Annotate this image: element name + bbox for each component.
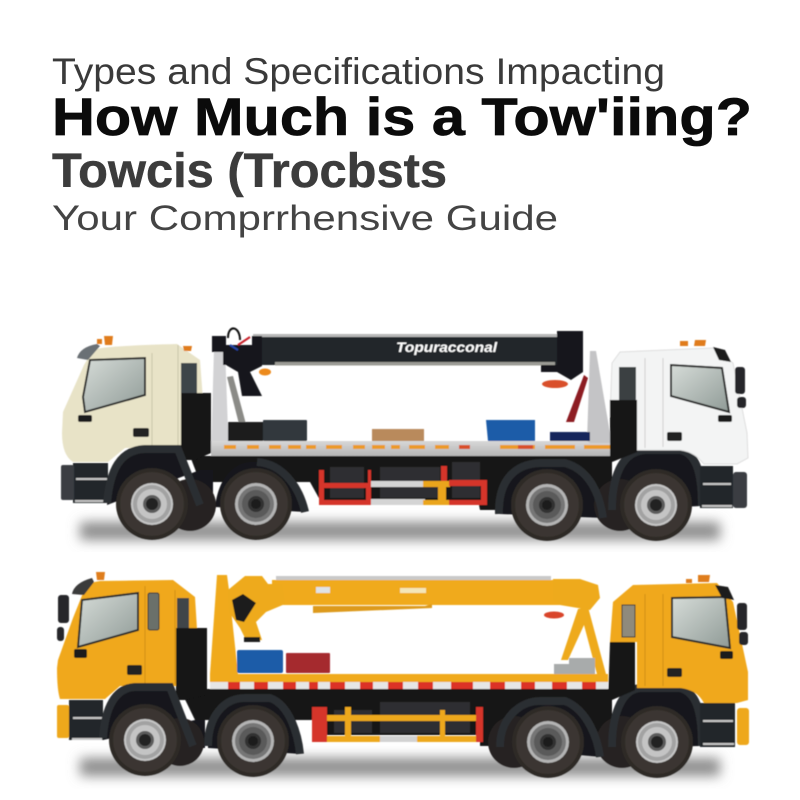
deck stripe	[210, 682, 608, 689]
grey cargo	[554, 658, 595, 674]
wooden crate	[372, 429, 424, 441]
hoses left	[228, 328, 250, 350]
door handles	[667, 432, 682, 441]
windshield	[83, 358, 145, 412]
wheel 4	[620, 469, 692, 541]
boom lettering: Topuracconal	[396, 339, 498, 355]
boom	[253, 334, 559, 366]
wheel 2	[217, 705, 289, 777]
red stripe accents	[459, 445, 533, 449]
right headboard	[587, 351, 612, 443]
dark toolbox	[263, 420, 307, 441]
left bumper and steps	[57, 700, 103, 740]
ground shadow	[80, 522, 720, 540]
windshield	[672, 597, 730, 648]
left headboard	[210, 575, 238, 674]
storage boxes under deck	[334, 702, 470, 733]
truck: top, cream and white cabs with black boom	[61, 328, 748, 541]
roof lamps	[680, 340, 706, 346]
visor	[715, 585, 734, 600]
ground shadow	[80, 758, 720, 776]
yellow left cab	[57, 572, 198, 699]
side guard: yellow rails with red ends	[312, 707, 483, 742]
cream cab	[62, 336, 203, 462]
amber lamp on crane	[259, 368, 271, 376]
right bumper and steps	[700, 703, 749, 747]
truck: bottom, yellow	[57, 572, 749, 778]
roof lamps	[686, 575, 710, 583]
title line: types and specifications: Types and Specifications Impacting	[52, 51, 665, 92]
title line: trucks: Towcis (Trocbsts	[52, 145, 447, 198]
door handles	[667, 668, 682, 677]
windshield	[78, 593, 138, 647]
crane head dark details	[232, 594, 260, 642]
rear tyres peeking	[156, 718, 204, 766]
door handles	[127, 665, 142, 675]
yellow right cab	[610, 575, 748, 703]
cargo behind right headboard	[550, 432, 590, 441]
mirrors	[737, 603, 747, 630]
chassis	[180, 689, 612, 746]
right bumper and steps	[700, 466, 747, 508]
roof lamps	[97, 336, 192, 351]
blue toolbox	[486, 420, 535, 441]
red toolbox	[286, 653, 330, 673]
deck	[210, 674, 608, 683]
wheel 3	[512, 706, 584, 778]
orange hook pad	[544, 612, 564, 618]
deck stripe	[224, 445, 610, 449]
crane head left	[212, 336, 262, 396]
blue toolbox	[237, 650, 283, 673]
wheel arches	[107, 449, 702, 518]
rear tyres peeking	[164, 479, 216, 531]
wheel wells	[103, 687, 702, 757]
wheel wells	[107, 449, 702, 518]
crane head right	[553, 579, 600, 610]
roof lamp	[96, 572, 105, 580]
chassis	[190, 456, 612, 510]
engine gap left	[181, 393, 211, 460]
wheel 1	[109, 704, 181, 776]
wheel 4	[621, 706, 693, 778]
engine gap left	[176, 628, 207, 700]
wheel 3	[511, 469, 583, 541]
louvre window	[622, 605, 635, 637]
right a-frame	[561, 607, 606, 674]
title line: guide: Your Comprrhensive Guide	[52, 199, 558, 238]
rear tyre peeking middle	[488, 716, 540, 768]
visor	[713, 347, 731, 362]
wheel 2	[220, 468, 292, 540]
side guard: red and silver rails	[319, 466, 487, 505]
left crate machinery	[228, 422, 263, 441]
rear side window	[177, 598, 189, 628]
visor	[77, 344, 100, 360]
crane head left	[228, 576, 285, 640]
wheel 1	[116, 468, 188, 540]
orange hook pad	[542, 380, 568, 388]
red hydraulic strut	[566, 375, 588, 422]
mirrors	[735, 367, 745, 394]
rear side window	[181, 363, 197, 393]
title line: how much is a towing: How Much is a Tow'iing?	[52, 88, 752, 147]
side small window	[148, 593, 159, 630]
left bumper and steps	[61, 463, 108, 503]
title block	[52, 51, 752, 238]
white cab	[610, 340, 748, 464]
boom	[272, 576, 562, 613]
engine gap right	[608, 642, 635, 700]
mirrors	[58, 595, 69, 623]
deck	[211, 441, 612, 456]
door handles	[133, 428, 149, 437]
rear tyre peeking right	[596, 716, 648, 768]
engine gap right	[610, 400, 637, 462]
rear tyre peeking right	[594, 479, 646, 531]
left headboard	[211, 348, 234, 456]
deck stripe red blocks	[228, 682, 596, 689]
windshield	[671, 365, 729, 412]
side window	[619, 367, 636, 401]
storage boxes under deck	[330, 462, 480, 498]
crane head right	[541, 331, 583, 380]
crane strut left	[227, 376, 246, 424]
wheel arches	[103, 687, 702, 757]
visor	[72, 578, 94, 595]
